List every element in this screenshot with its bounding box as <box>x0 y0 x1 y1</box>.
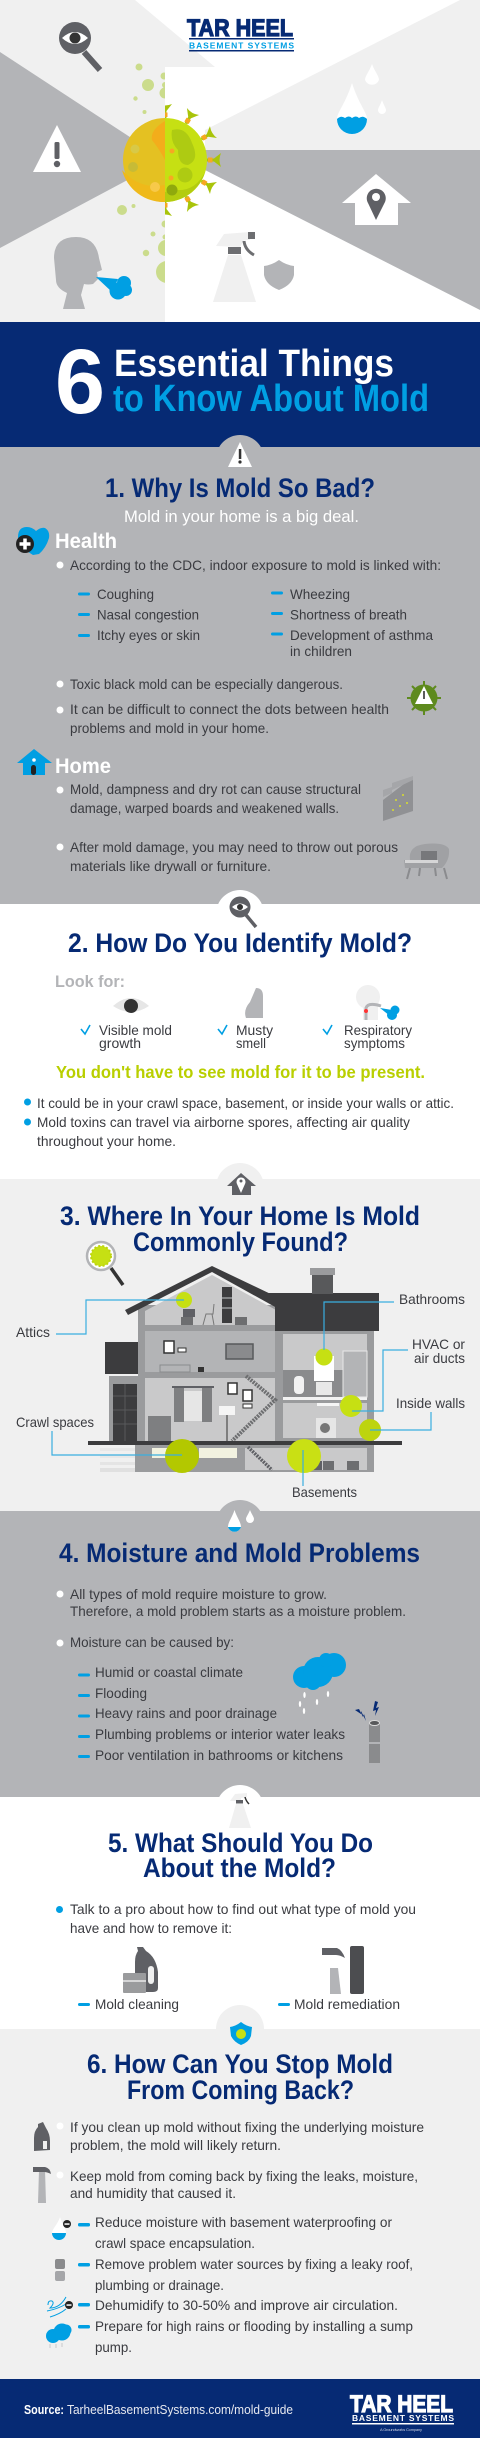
prevention list: Remove problem water sources by fixing a leaky roof, <box>95 2257 413 2272</box>
health bullets: Wheezing <box>290 587 350 602</box>
footer logo: TAR HEEL <box>350 2391 453 2418</box>
icon: coughing head <box>54 237 132 309</box>
health bullets: Toxic black mold can be especially dangerous. <box>70 677 343 692</box>
bullets: throughout your home. <box>37 1134 176 1149</box>
look for label: Look for: <box>55 972 125 991</box>
icon: home <box>17 749 52 775</box>
icon: throat with cough <box>356 985 400 1020</box>
logo: BASEMENT SYSTEMS <box>189 40 294 50</box>
bullets: If you clean up mold without fixing the underlying moisture <box>70 2120 424 2135</box>
title line one: Essential Things <box>114 343 394 385</box>
icon: home pin <box>342 174 411 225</box>
icon: virus warning <box>407 681 441 715</box>
bullets <box>56 2120 424 2201</box>
home bullets: damage, warped boards and weakened walls. <box>70 801 339 816</box>
health bullets: problems and mold in your home. <box>70 721 269 736</box>
heading <box>60 1201 420 1257</box>
panel: where mold is found <box>0 1163 480 1511</box>
prevention list <box>78 2215 413 2355</box>
health heading: Health <box>55 530 117 553</box>
footer logo <box>350 2391 454 2432</box>
look-for checks and labels: Visible mold <box>99 1023 172 1038</box>
health bullets: According to the CDC, indoor exposure to mold is linked with: <box>70 558 441 573</box>
icon: spray bottle <box>213 232 256 302</box>
heading: 5. What Should You Do <box>108 1828 373 1858</box>
health bullets: Development of asthma <box>290 628 433 643</box>
icon: warning <box>228 442 252 467</box>
home bullets: materials like drywall or furniture. <box>70 859 271 874</box>
icon: moldy wall <box>383 776 413 821</box>
home bullets <box>56 782 398 874</box>
bullets: and humidity that caused it. <box>70 2186 236 2201</box>
icon: hammer <box>33 2167 51 2203</box>
title band <box>0 322 480 447</box>
callout: You don't have to see mold for it to be present. <box>56 1062 425 1082</box>
look-for checks and labels: symptoms <box>344 1036 405 1051</box>
heading: 2. How Do You Identify Mold? <box>68 928 412 958</box>
icon: cleaner and sponge <box>123 1947 158 1993</box>
subheading: Mold in your home is a big deal. <box>124 507 359 526</box>
icon: magnifier eye <box>59 22 100 70</box>
bullet: Talk to a pro about how to find out what type of mold you <box>70 1902 416 1917</box>
heading: Commonly Found? <box>133 1227 348 1257</box>
title line two: to Know About Mold <box>113 378 429 420</box>
callout labels: air ducts <box>414 1351 465 1366</box>
heading: 6. How Can You Stop Mold <box>87 2049 393 2079</box>
callout labels: Basements <box>292 1485 357 1500</box>
bullets <box>24 1096 454 1149</box>
icon: spray bottle <box>229 1793 251 1828</box>
bullets: Keep mold from coming back by fixing the leaks, moisture, <box>70 2169 418 2184</box>
spores <box>117 64 165 283</box>
panel: what to do <box>0 1785 480 2029</box>
heading: 4. Moisture and Mold Problems <box>59 1538 420 1568</box>
bullet <box>56 1902 416 1936</box>
panel: moisture and mold <box>0 1500 480 1797</box>
callout labels <box>16 1292 465 1500</box>
callout labels: Crawl spaces <box>16 1415 94 1430</box>
moisture causes list: Plumbing problems or interior water leaks <box>95 1727 345 1742</box>
icon: nose <box>245 988 263 1018</box>
moisture causes list <box>78 1665 345 1763</box>
heading: 3. Where In Your Home Is Mold <box>60 1201 420 1231</box>
prevention list: plumbing or drainage. <box>95 2278 224 2293</box>
mold hotspots <box>165 1292 381 1473</box>
home bullets: Mold, dampness and dry rot can cause structural <box>70 782 361 797</box>
icon: water drops <box>337 64 386 134</box>
icon: drops <box>228 1510 254 1532</box>
prevention list: pump. <box>95 2340 132 2355</box>
icon: home pin <box>227 1173 256 1195</box>
footer logo: BASEMENT SYSTEMS <box>352 2413 454 2423</box>
icon: pipe <box>55 2259 65 2281</box>
icon: leaking pipe <box>355 1701 380 1763</box>
look-for checks and labels: Respiratory <box>344 1023 412 1038</box>
health bullets: Itchy eyes or skin <box>97 628 200 643</box>
look-for checks and labels: Musty <box>236 1023 273 1038</box>
icon: shield <box>264 260 294 290</box>
moisture causes list: Poor ventilation in bathrooms or kitchens <box>95 1748 343 1763</box>
health bullets <box>56 558 441 736</box>
prevention list: Reduce moisture with basement waterproofing or <box>95 2215 392 2230</box>
bullets: Mold toxins can travel via airborne spores, affecting air quality <box>37 1115 410 1130</box>
look-for checks and labels <box>81 1023 412 1051</box>
moisture causes list: Flooding <box>95 1686 147 1701</box>
icon: shield <box>230 2022 252 2045</box>
panel: why mold is bad <box>0 435 480 904</box>
icon: moldy chair <box>404 844 449 879</box>
prevention list: crawl space encapsulation. <box>95 2236 255 2251</box>
house cross-section <box>88 1266 402 1473</box>
title number: 6 <box>55 331 105 433</box>
callout labels: Bathrooms <box>399 1292 465 1307</box>
footer logo: A Groundworks Company <box>380 2427 422 2432</box>
heading: About the Mold? <box>143 1853 336 1883</box>
heading: 1. Why Is Mold So Bad? <box>105 473 375 503</box>
callout labels: HVAC or <box>412 1337 465 1352</box>
icon: rain cloud <box>46 2324 72 2348</box>
health bullets: Coughing <box>97 587 154 602</box>
source line: TarheelBasementSystems.com/mold-guide <box>67 2402 293 2417</box>
bullets: problem, the mold will likely return. <box>70 2138 281 2153</box>
home bullets: After mold damage, you may need to throw out porous <box>70 840 398 855</box>
callout lines <box>52 1300 431 1486</box>
icon: rain cloud <box>293 1653 346 1714</box>
bullets: All types of mold require moisture to grow. <box>70 1587 327 1602</box>
bullets <box>56 1587 406 1650</box>
health bullets: Nasal congestion <box>97 608 199 622</box>
look-for checks and labels: smell <box>236 1036 266 1051</box>
health bullets: Shortness of breath <box>290 608 407 622</box>
icon: magnifier with mold <box>87 1242 123 1285</box>
source line: Source: <box>24 2402 64 2417</box>
panel: stop mold returning <box>0 2005 480 2379</box>
remediation options: Mold remediation <box>294 1997 400 2012</box>
remediation options: Mold cleaning <box>95 1997 179 2012</box>
moisture causes list: Humid or coastal climate <box>95 1665 243 1680</box>
icon: warning triangle <box>33 125 81 172</box>
remediation options <box>78 1997 400 2012</box>
icon: hammer and board <box>322 1946 364 1994</box>
look-for checks and labels: growth <box>99 1036 141 1051</box>
icon: bottle <box>34 2122 50 2151</box>
heading <box>108 1828 373 1883</box>
home heading: Home <box>55 755 111 778</box>
health bullets: in children <box>290 644 352 659</box>
icon: eye <box>113 998 149 1013</box>
bullets: Therefore, a mold problem starts as a moisture problem. <box>70 1604 406 1619</box>
prevention list: Prepare for high rains or flooding by installing a sump <box>95 2319 413 2334</box>
bullet: have and how to remove it: <box>70 1921 232 1936</box>
bullets: It could be in your crawl space, basement, or inside your walls or attic. <box>37 1096 454 1111</box>
moisture causes list: Heavy rains and poor drainage <box>95 1706 277 1721</box>
callout labels: Attics <box>16 1325 50 1340</box>
icon: health heart <box>16 527 49 555</box>
heading: From Coming Back? <box>127 2075 354 2105</box>
logo <box>187 15 294 52</box>
logo: TAR HEEL <box>187 15 293 42</box>
icon: magnifier <box>230 896 256 927</box>
icon: mold virus <box>122 104 221 216</box>
prevention list: Dehumidify to 30-50% and improve air circulation. <box>95 2298 398 2313</box>
heading <box>87 2049 393 2105</box>
health bullets: It can be difficult to connect the dots between health <box>70 702 389 717</box>
icon: drop minus <box>52 2217 71 2240</box>
footer <box>0 2379 480 2438</box>
panel: identify mold <box>0 890 480 1179</box>
icon: air flow <box>47 2297 73 2317</box>
callout labels: Inside walls <box>396 1396 465 1411</box>
bullets: Moisture can be caused by: <box>70 1635 234 1650</box>
hero panel <box>0 0 480 322</box>
